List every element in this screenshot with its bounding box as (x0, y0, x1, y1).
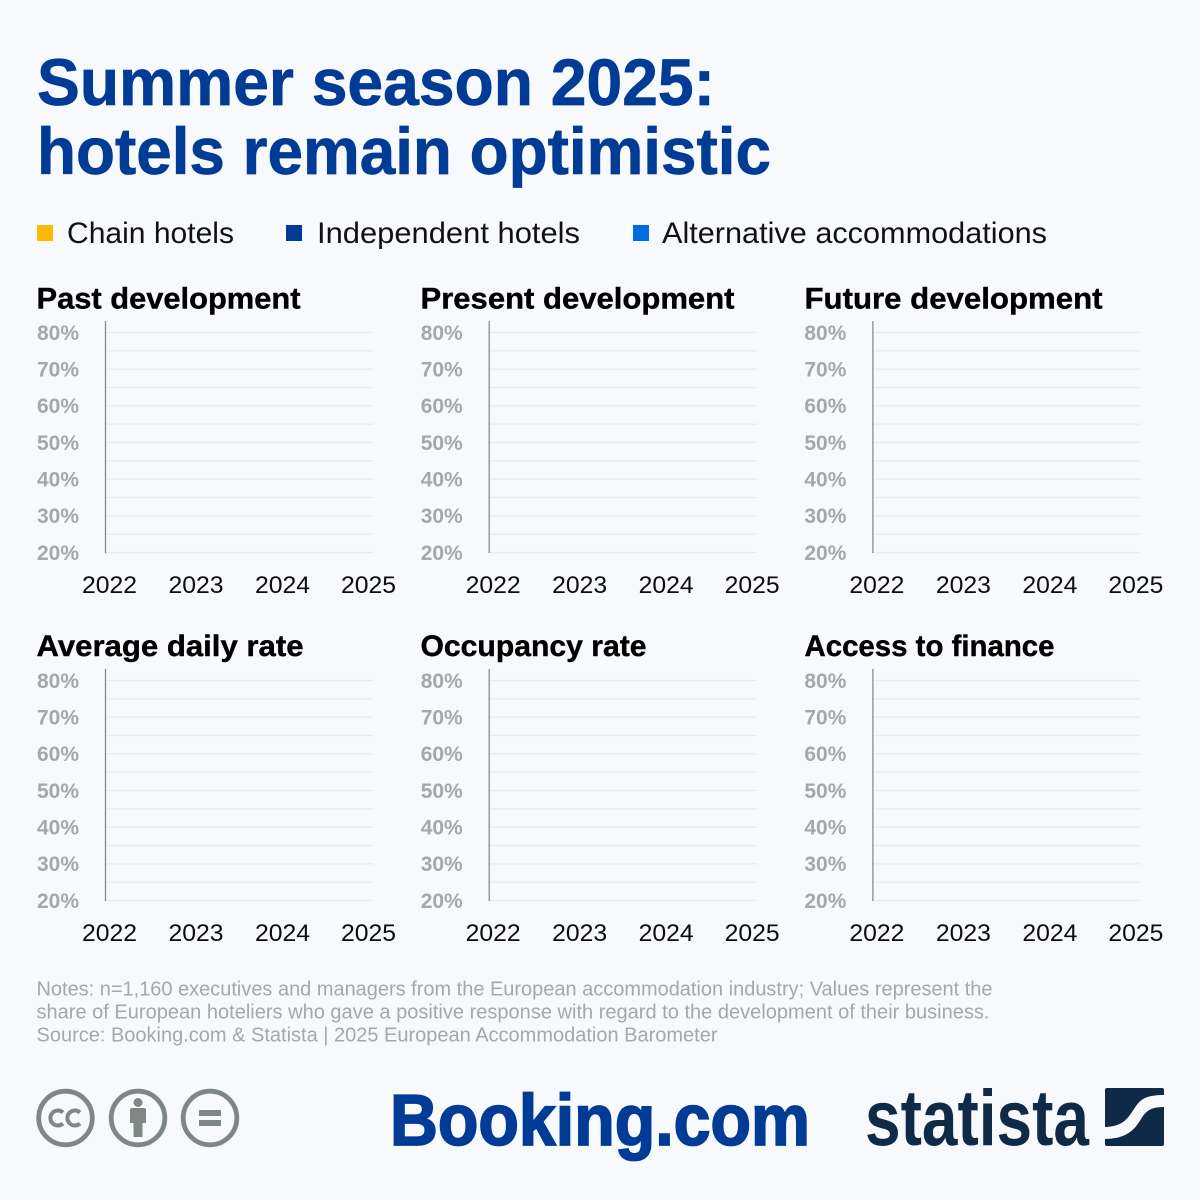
legend item: alternative accommodations: Alternative accommodations (662, 217, 1047, 250)
panel: occupancy rate: 40% (421, 816, 463, 840)
legend (37, 217, 1047, 250)
panel: access to finance: 20% (804, 890, 847, 913)
panel: access to finance: 40% (804, 816, 847, 840)
notes and source: Source: Booking.com & Statista | 2025 European Accommodation Barometer (36, 1024, 718, 1046)
panel: average daily rate: 80% (37, 670, 79, 693)
panel: past development: 2024 (255, 572, 310, 599)
panel: occupancy rate: 60% (421, 743, 463, 766)
panel: present development: 30% (421, 505, 463, 528)
panel: occupancy rate: 2023 (552, 920, 607, 947)
logo: statista icon (1104, 1088, 1165, 1146)
panel: average daily rate: Average daily rate (36, 630, 304, 663)
panel: access to finance: 50% (804, 780, 847, 803)
panel: access to finance: Access to finance (804, 630, 1054, 663)
panel: past development: 30% (37, 505, 79, 528)
panel: future development: 20% (804, 542, 847, 565)
panel: average daily rate: 30% (37, 853, 79, 876)
panel: access to finance: 2024 (1022, 920, 1077, 947)
panel: occupancy rate: 80% (421, 670, 463, 693)
panel: occupancy rate: 70% (421, 706, 463, 730)
panel: average daily rate: 2023 (168, 920, 224, 947)
panel: present development: 40% (421, 468, 463, 492)
panel: access to finance: 80% (804, 670, 847, 693)
panel: average daily rate: 2025 (341, 920, 396, 947)
panel: present development (420, 282, 780, 599)
panel: access to finance: 2025 (1108, 920, 1163, 947)
panel: access to finance (804, 630, 1163, 947)
icon: no derivatives (183, 1091, 237, 1145)
panel: access to finance: 2023 (936, 920, 991, 947)
panel: access to finance: 2022 (849, 920, 904, 947)
panel: access to finance: 70% (804, 706, 847, 730)
panel: average daily rate: 20% (37, 890, 79, 913)
panel: past development: 20% (37, 542, 79, 565)
panel: future development: 2023 (936, 572, 991, 599)
panel: occupancy rate: 20% (421, 890, 463, 913)
panel: past development: 70% (37, 358, 79, 382)
panel: past development: Past development (36, 282, 301, 316)
panel: average daily rate: 40% (37, 816, 79, 840)
panel: past development: 2023 (168, 572, 224, 599)
logo: Booking.com: Booking.com (390, 1081, 810, 1161)
panel: past development: 80% (37, 322, 79, 345)
panel: occupancy rate: 30% (421, 853, 463, 876)
panel: past development: 60% (37, 395, 79, 418)
panel: present development: 60% (421, 395, 463, 418)
panel: past development: 2025 (341, 572, 396, 599)
panel: average daily rate: 70% (37, 706, 79, 730)
panel: future development: 50% (804, 432, 847, 455)
panel: future development (804, 282, 1163, 599)
panel: average daily rate (36, 630, 396, 947)
legend item: independent hotels: Independent hotels (317, 217, 580, 250)
panel: present development: 2022 (466, 572, 521, 599)
legend item: chain hotels: Chain hotels (67, 217, 234, 250)
title: hotels remain optimistic (37, 114, 771, 188)
icon: attribution (111, 1091, 165, 1145)
panel: present development: 70% (421, 358, 463, 382)
panel: future development: 40% (804, 468, 847, 492)
panel: present development: 2025 (725, 572, 780, 599)
panel: average daily rate: 50% (37, 780, 79, 803)
panel: future development: 2024 (1022, 572, 1077, 599)
panel: present development: Present development (420, 282, 734, 316)
panel: occupancy rate: 2025 (725, 920, 780, 947)
panel: present development: 20% (421, 542, 463, 565)
icon: creative commons (39, 1091, 92, 1145)
panel: past development: 50% (37, 432, 79, 455)
panel: future development: 2022 (849, 572, 904, 599)
panel: future development: 30% (804, 505, 847, 528)
panel: future development: 80% (804, 322, 847, 345)
panel: present development: 50% (421, 432, 463, 455)
panel: occupancy rate: 50% (421, 780, 463, 803)
panel: past development: 2022 (82, 572, 137, 599)
panel: future development: 60% (804, 395, 847, 418)
panel: future development: Future development (804, 282, 1103, 316)
notes and source: share of European hoteliers who gave a positive response with regard to the development of their business. (36, 1002, 990, 1024)
panel: present development: 2023 (552, 572, 607, 599)
notes and source: Notes: n=1,160 executives and managers from the European accommodation industry; Values represent the (36, 978, 992, 1000)
panel: past development (36, 282, 396, 599)
panel: occupancy rate: 2024 (639, 920, 694, 947)
panel: future development: 2025 (1108, 572, 1163, 599)
logo: statista wordmark: statista (865, 1073, 1090, 1162)
title: Summer season 2025: (37, 45, 715, 119)
panel: average daily rate: 2022 (82, 920, 137, 947)
panel: access to finance: 60% (804, 743, 847, 766)
notes and source (36, 978, 992, 1046)
panel: occupancy rate: Occupancy rate (420, 630, 646, 663)
panel: occupancy rate: 2022 (466, 920, 521, 947)
panel: average daily rate: 2024 (255, 920, 310, 947)
title (37, 45, 771, 188)
panel: access to finance: 30% (804, 853, 847, 876)
panel: present development: 2024 (639, 572, 694, 599)
panel: past development: 40% (37, 468, 79, 492)
panel: present development: 80% (421, 322, 463, 345)
panel: future development: 70% (804, 358, 847, 382)
panel: average daily rate: 60% (37, 743, 79, 766)
panel: occupancy rate (420, 630, 780, 947)
